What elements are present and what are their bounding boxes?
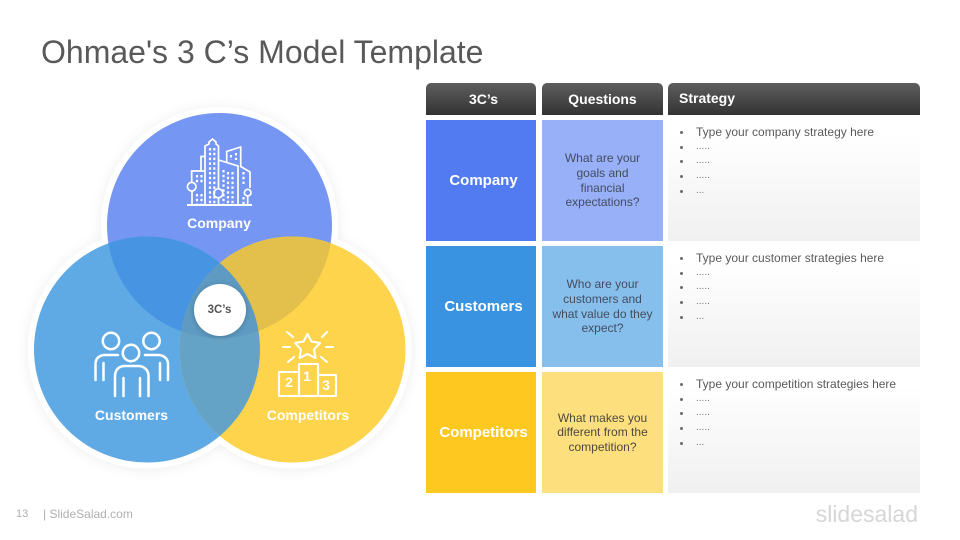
row 3 question: different from the — [557, 425, 648, 439]
row 3 strategy: ... — [696, 437, 704, 448]
label: customers: Customers — [95, 407, 168, 423]
row 2 strategy — [668, 246, 920, 367]
row 2 strategy: ..... — [696, 267, 710, 278]
row 1 strategy: ..... — [696, 155, 710, 166]
row 1 question — [542, 120, 663, 241]
icon: podium and star — [279, 332, 336, 396]
footer: site name: | SlideSalad.com — [43, 507, 133, 521]
label: competitors: Competitors — [267, 407, 349, 423]
row 2 label: customers — [426, 246, 536, 367]
row 1 strategy — [668, 120, 920, 241]
podium numbers: 1 — [303, 368, 311, 384]
circle: customers — [34, 236, 260, 462]
row 2 strategy: Type your customer strategies here — [696, 251, 884, 265]
row 1 strategy: ... — [696, 185, 704, 196]
venn diagram — [28, 113, 412, 470]
row 3 label: competitors — [426, 372, 536, 493]
row 3 strategy: ..... — [696, 407, 710, 418]
table header: strategy — [668, 83, 920, 115]
row 2 label: customers: Customers — [444, 298, 523, 315]
podium numbers — [285, 368, 330, 393]
table header: 3C's — [426, 83, 536, 115]
row 1 strategy: ..... — [696, 170, 710, 181]
label: company: Company — [187, 215, 251, 231]
circle: company — [107, 113, 332, 338]
podium numbers: 2 — [285, 374, 293, 390]
row 1 strategy: ..... — [696, 141, 710, 152]
row 1 label: company — [426, 120, 536, 241]
center badge: 3C's — [194, 284, 246, 336]
row 1 label: company: Company — [449, 172, 518, 189]
row 2 question: Who are your — [566, 277, 638, 291]
footer: page number: 13 — [16, 508, 28, 520]
white rings — [28, 107, 412, 468]
row 3 strategy: Type your competition strategies here — [696, 377, 896, 391]
footer: logo: slidesalad — [816, 501, 918, 527]
row 3 question — [542, 372, 663, 493]
row 1 question: expectations? — [565, 195, 640, 209]
podium numbers: 3 — [322, 377, 330, 393]
circle: competitors — [180, 236, 406, 462]
row 3 strategy — [668, 372, 920, 493]
overlap: all three — [181, 263, 258, 338]
row 2 strategy: ..... — [696, 296, 710, 307]
row 2 strategy: ..... — [696, 281, 710, 292]
table header: questions — [542, 83, 663, 115]
table header: questions: Questions — [568, 91, 637, 107]
row 2 strategy: ... — [696, 311, 704, 322]
row 1 question: What are your — [565, 151, 640, 165]
overlap: company and competitors — [181, 236, 330, 331]
icon: city buildings — [187, 139, 252, 205]
row 3 strategy: ..... — [696, 393, 710, 404]
title: Ohmae's 3 C’s Model Template — [41, 34, 483, 70]
overlap: company and customers — [108, 236, 220, 331]
row 1 strategy: Type your company strategy here — [696, 125, 874, 139]
icon: customers group — [96, 333, 168, 396]
row 2 question: expect? — [581, 321, 624, 335]
center badge: 3C's: 3C’s — [208, 304, 231, 316]
row 1 question: financial — [580, 180, 625, 194]
row 3 strategy: ..... — [696, 422, 710, 433]
table header: 3C's: 3C’s — [469, 91, 498, 107]
row 3 question: What makes you — [558, 411, 647, 425]
row 2 question — [542, 246, 663, 367]
row 3 question: competition? — [568, 440, 637, 454]
row 3 label: competitors: Competitors — [439, 424, 528, 441]
row 1 question: goals and — [576, 166, 629, 180]
table header: strategy: Strategy — [679, 90, 735, 106]
row 2 question: what value do they — [552, 306, 653, 320]
row 2 question: customers and — [563, 292, 642, 306]
overlap: customers and competitors — [180, 263, 260, 436]
